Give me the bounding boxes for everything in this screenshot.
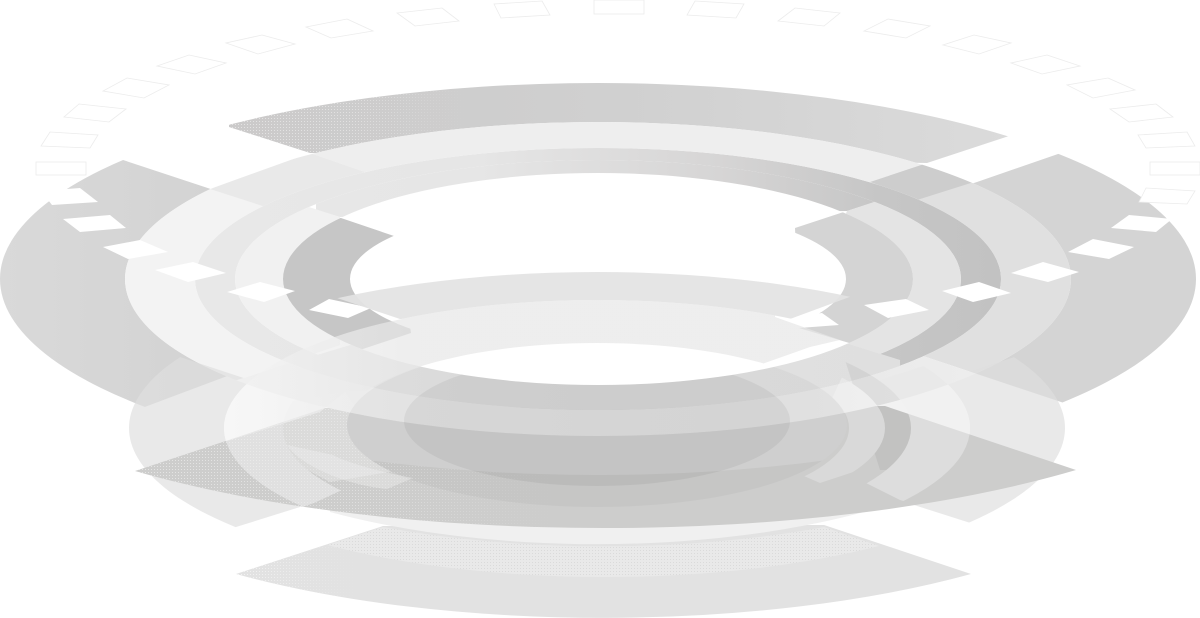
sector: top band in hole <box>338 272 850 319</box>
sector: right inner band <box>795 212 913 343</box>
sector: right inner light band <box>846 202 961 354</box>
sector: lower left inner fragment <box>287 445 413 489</box>
sector: right band <box>920 183 1071 374</box>
ring: continuous grey band <box>195 148 1001 410</box>
sector: left dark band <box>283 218 411 349</box>
sector: lower right inner overlay <box>805 406 885 483</box>
sector: left inner light band <box>235 207 340 348</box>
upper ring system: bottom bands <box>244 344 970 475</box>
sector: lower right dark arc <box>846 362 911 470</box>
sector: top light band <box>313 122 922 182</box>
sector: right outer band <box>973 154 1196 402</box>
dark sector: wide lower band <box>135 406 1076 528</box>
sector: bottom middle band <box>244 356 970 436</box>
lower ring: translucent side sectors <box>129 364 1065 527</box>
sector: lower left inner band <box>283 408 390 482</box>
sector: left light band <box>125 190 280 378</box>
sector: top inner band <box>316 160 874 217</box>
sector: left outer band <box>0 160 226 407</box>
shade: small centre ellipse <box>404 375 790 486</box>
sector: bottom inner band <box>372 344 900 410</box>
bottom sector: outermost band <box>236 500 971 618</box>
sector: bottom outer band <box>347 413 847 475</box>
tile ring <box>36 0 1200 336</box>
sector: lower left outer <box>129 364 300 527</box>
sector: top outer band <box>229 83 1008 163</box>
shade: large centre ellipse <box>347 343 847 507</box>
sector: lower right outer <box>914 374 1065 522</box>
upper ring system: sides and top <box>0 83 1196 407</box>
dots: top outer band texture <box>229 94 418 152</box>
sector: lower left light overlay <box>226 424 340 506</box>
sector: left upper light band <box>211 154 364 206</box>
sector: lower right light overlay <box>867 385 970 501</box>
lower ring: centre shading and top bands <box>226 272 970 506</box>
sector: light band from top to left <box>226 300 839 442</box>
sector: right dark connector <box>870 164 972 200</box>
